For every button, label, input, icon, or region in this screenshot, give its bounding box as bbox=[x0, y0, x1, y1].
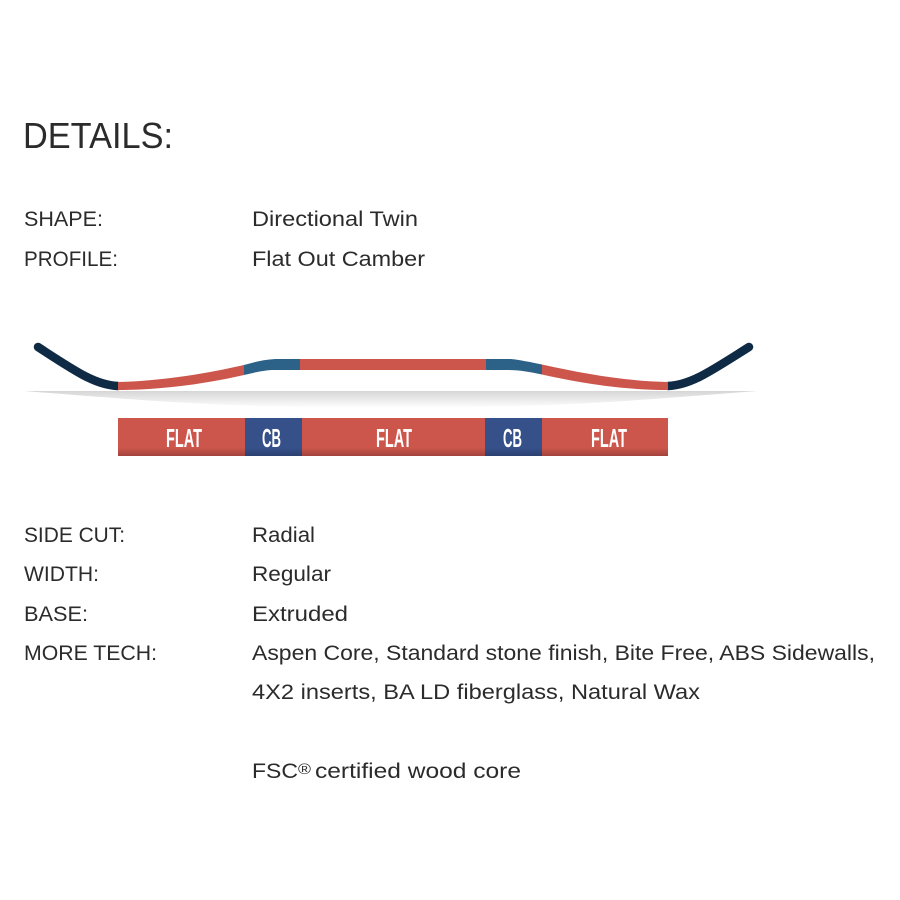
flat segment 1 bbox=[118, 418, 245, 456]
profile row: Flat Out Camber bbox=[252, 247, 425, 271]
camber segment 1 bbox=[245, 418, 302, 456]
ground shadow bbox=[24, 391, 757, 408]
shape row bbox=[24, 207, 418, 231]
title: DETAILS: bbox=[23, 115, 173, 156]
tail tip bbox=[668, 347, 749, 386]
base row: BASE: bbox=[24, 602, 88, 626]
flat segment 2: FLAT bbox=[376, 423, 412, 453]
more tech row bbox=[24, 641, 875, 704]
profile legend bar bbox=[118, 418, 668, 456]
camber section left bbox=[244, 359, 300, 375]
profile row bbox=[24, 247, 425, 271]
more tech row: Aspen Core, Standard stone finish, Bite Free, ABS Sidewalls, bbox=[252, 641, 875, 665]
flat segment 3: FLAT bbox=[591, 423, 627, 453]
flat segment 3 bbox=[542, 418, 668, 456]
shape row: Directional Twin bbox=[252, 207, 418, 231]
flat section centre bbox=[300, 359, 486, 370]
base row: Extruded bbox=[252, 602, 348, 626]
camber section right bbox=[486, 359, 542, 374]
flat section left bbox=[118, 365, 244, 390]
board profile diagram bbox=[24, 347, 757, 408]
side cut row: SIDE CUT: bbox=[24, 523, 125, 547]
flat segment 1: FLAT bbox=[166, 423, 202, 453]
flat segment 2 bbox=[302, 418, 485, 456]
profile row: PROFILE: bbox=[24, 247, 118, 271]
base row bbox=[24, 602, 348, 626]
nose tip bbox=[38, 347, 118, 386]
more tech row: MORE TECH: bbox=[24, 641, 157, 665]
width row: WIDTH: bbox=[24, 562, 99, 586]
certification note: ® bbox=[298, 761, 311, 778]
shape row: SHAPE: bbox=[24, 207, 103, 231]
camber segment 1: CB bbox=[262, 423, 281, 453]
more tech row: 4X2 inserts, BA LD fiberglass, Natural Wax bbox=[252, 680, 700, 704]
width row: Regular bbox=[252, 562, 331, 586]
side cut row: Radial bbox=[252, 523, 315, 547]
certification note bbox=[252, 759, 521, 783]
width row bbox=[24, 562, 331, 586]
certification note: FSC bbox=[252, 759, 298, 783]
flat section right bbox=[542, 364, 668, 390]
side cut row bbox=[24, 523, 315, 547]
camber segment 2 bbox=[485, 418, 542, 456]
certification note: certified wood core bbox=[315, 759, 521, 783]
camber segment 2: CB bbox=[503, 423, 522, 453]
